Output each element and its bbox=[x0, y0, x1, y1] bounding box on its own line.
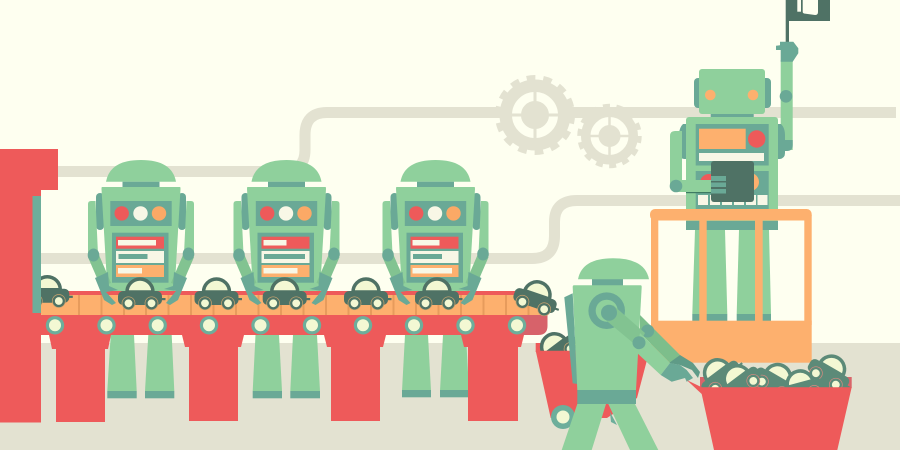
teal machine door bbox=[32, 196, 41, 313]
near elbow bbox=[632, 336, 646, 349]
shoulder pin bbox=[601, 305, 617, 321]
conveyor belt bbox=[41, 291, 548, 335]
car emerging from machine bbox=[25, 277, 73, 308]
fingers bbox=[711, 176, 726, 194]
robot 3 body bbox=[382, 160, 488, 300]
hat bbox=[578, 258, 649, 279]
robot 1 body bbox=[88, 160, 194, 300]
platform robot bbox=[670, 0, 830, 230]
robot 3 arms and hands bbox=[382, 248, 489, 305]
shoulders bbox=[778, 124, 793, 159]
far arm bbox=[640, 315, 680, 363]
front cart bbox=[687, 380, 852, 450]
rear cart with car bbox=[529, 321, 647, 429]
platform robot legs bbox=[692, 230, 771, 321]
left elbow bbox=[670, 180, 682, 192]
walking robot bbox=[562, 258, 700, 450]
far hand bbox=[669, 355, 700, 378]
upper arm bbox=[602, 305, 645, 347]
lower pipe bbox=[40, 200, 900, 258]
chest panel lower bbox=[696, 171, 769, 209]
torso base bbox=[686, 221, 778, 230]
left arm bbox=[670, 131, 682, 186]
conveyor support 2 bbox=[182, 335, 244, 421]
large gear bbox=[498, 78, 572, 152]
heap filler of car bodies bbox=[708, 372, 845, 388]
robot 2 body bbox=[234, 160, 340, 300]
upper pipe bbox=[40, 112, 896, 172]
raised arm bbox=[781, 60, 793, 150]
ears bbox=[694, 78, 704, 108]
head bbox=[699, 69, 765, 114]
factory machine bbox=[0, 149, 58, 422]
left leg bbox=[562, 404, 606, 450]
conveyor support 1 bbox=[49, 335, 111, 422]
near hand bbox=[661, 363, 693, 382]
tablet bbox=[711, 161, 754, 202]
robot 2 arms and hands bbox=[233, 248, 340, 305]
conveyor support 3 bbox=[324, 335, 386, 421]
forearm holding tablet bbox=[676, 180, 712, 192]
torso bbox=[686, 117, 778, 223]
elbow bbox=[780, 90, 792, 103]
cars on conveyor bbox=[118, 275, 565, 320]
rollers bbox=[46, 316, 526, 334]
neck bbox=[711, 112, 754, 118]
neck bbox=[592, 279, 623, 286]
eyes bbox=[705, 90, 716, 100]
near forearm bbox=[636, 333, 670, 375]
conveyor support 4 bbox=[461, 335, 524, 421]
torso bbox=[573, 285, 642, 390]
factory floor bbox=[0, 343, 900, 450]
right leg bbox=[608, 404, 658, 450]
flag bbox=[786, 0, 830, 45]
heap of cars bbox=[692, 347, 860, 407]
front cart back rim bbox=[700, 377, 852, 388]
chest panel upper bbox=[696, 124, 769, 166]
platform cage bbox=[650, 209, 812, 363]
shoulder joint bbox=[588, 292, 625, 329]
belt bbox=[577, 390, 636, 404]
small gear bbox=[580, 106, 640, 166]
far elbow bbox=[641, 324, 654, 338]
backpack bbox=[564, 293, 577, 384]
robot legs under conveyor bbox=[107, 335, 469, 398]
raised hand bbox=[776, 42, 798, 62]
robot 1 arms and hands bbox=[88, 248, 194, 305]
